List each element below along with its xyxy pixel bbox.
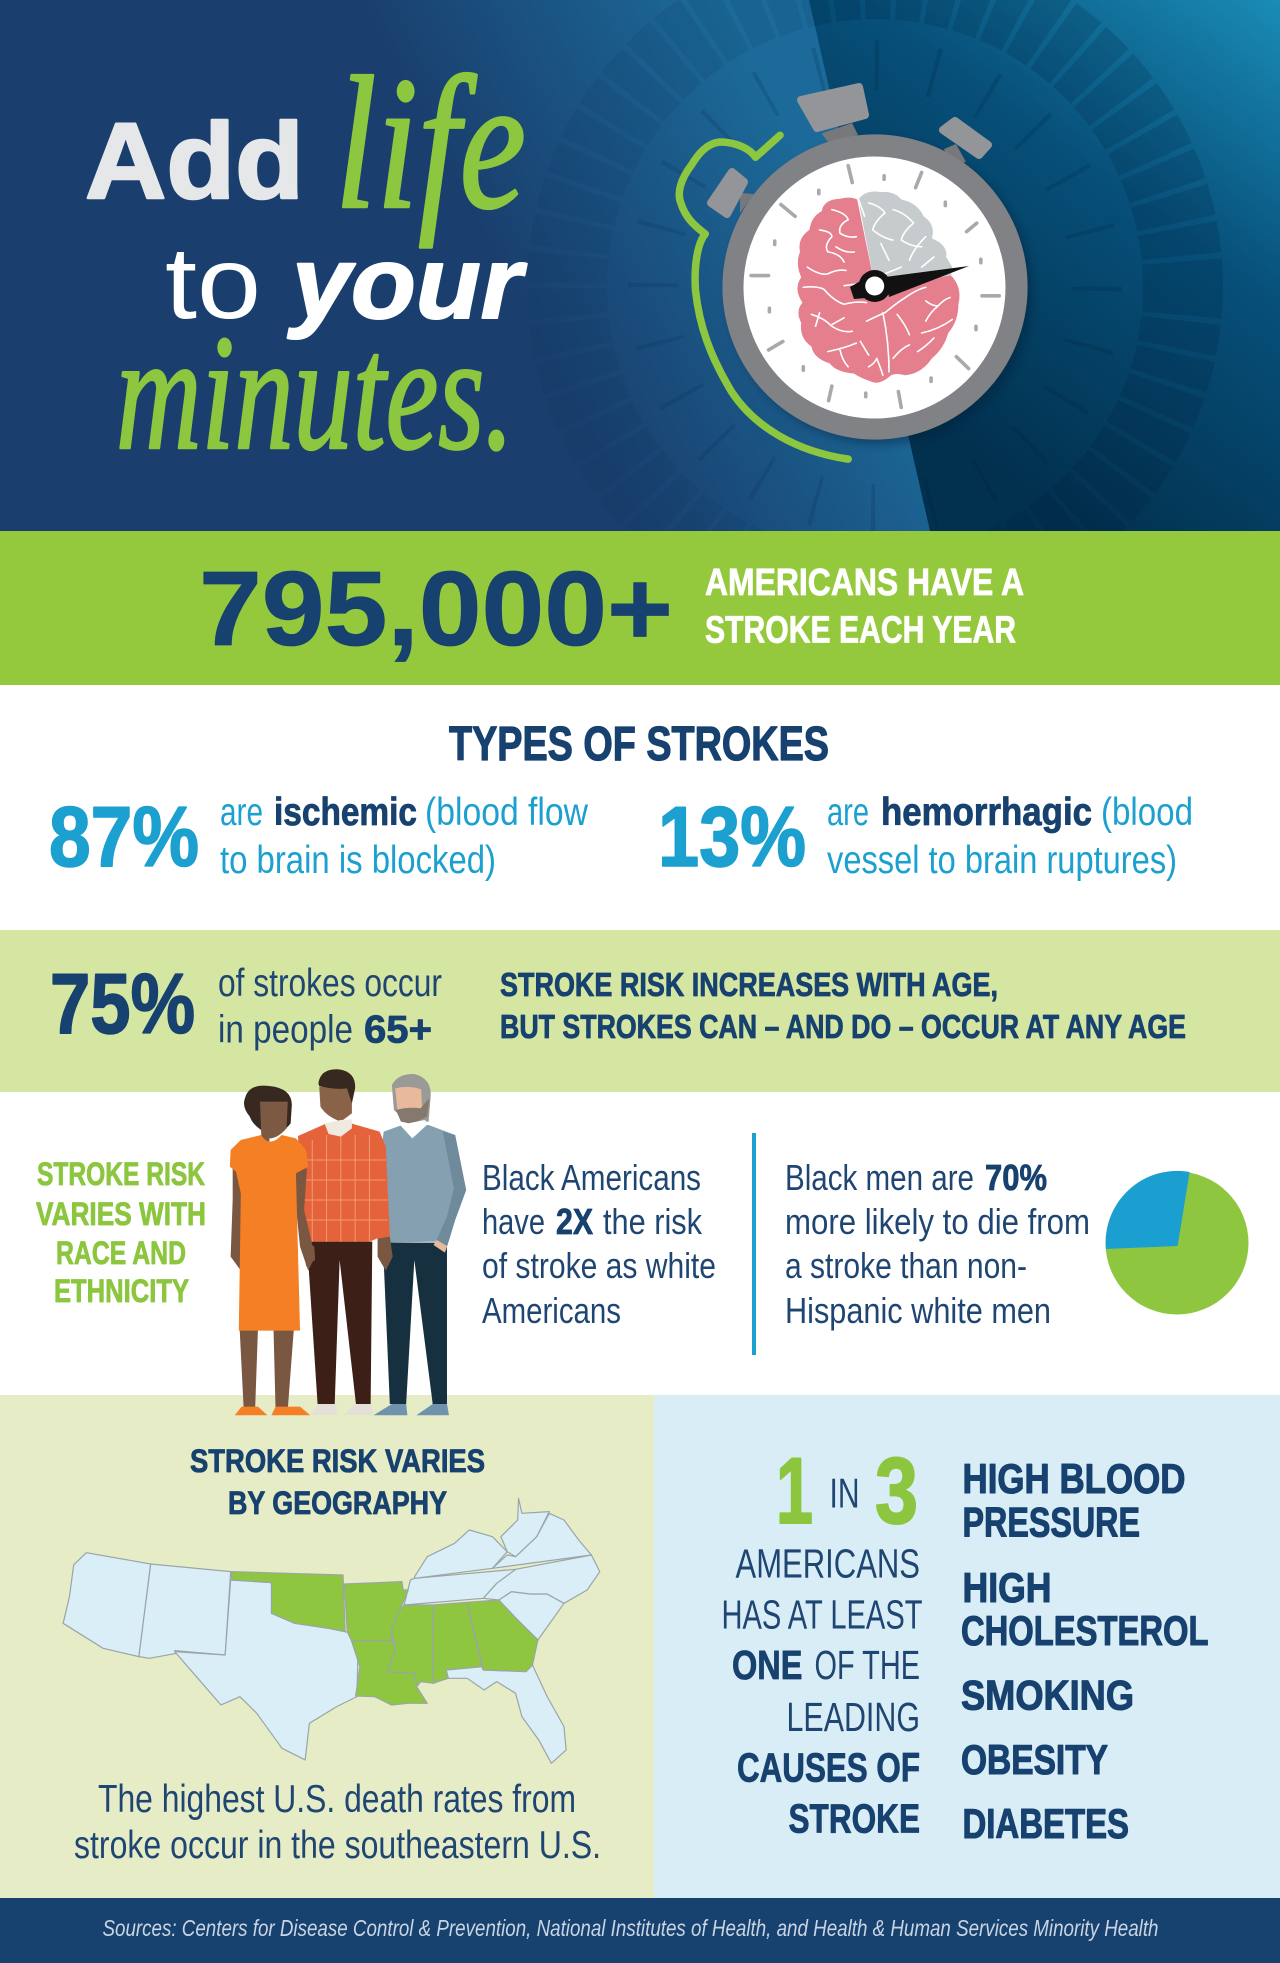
text: Black men risk [785, 1157, 1090, 1331]
stat: 87% ischemic: to brain is blocked) [220, 839, 496, 882]
1 in 3 statistic: 3 [875, 1438, 918, 1543]
text: Black Americans risk [482, 1157, 716, 1331]
stopwatch body [722, 134, 1028, 440]
race heading: RACE AND [56, 1235, 186, 1271]
panel: types of strokes [0, 685, 1280, 930]
title: minutes. [116, 301, 514, 484]
illustration: three people [230, 1069, 466, 1415]
title: life [335, 39, 526, 249]
panel: age band [0, 930, 1280, 1092]
1 in 3 statistic: IN [830, 1470, 860, 1516]
stat: 13% hemorrhagic: 13% [658, 790, 806, 885]
stat: 13% hemorrhagic [658, 790, 1193, 885]
age statement [500, 966, 1186, 1045]
heading: TYPES OF STROKES [449, 718, 829, 771]
stat: 13% hemorrhagic: vessel to brain ruptures) [827, 839, 1177, 882]
text: Black men risk: 70% [985, 1157, 1047, 1198]
race heading [36, 1156, 206, 1309]
stopwatch dial [744, 156, 1006, 418]
map: southern United States [63, 1498, 600, 1763]
age statement: STROKE RISK INCREASES WITH AGE, [500, 966, 998, 1003]
risk factor list: HIGH BLOOD [962, 1455, 1186, 1502]
panel: race and ethnicity [0, 1092, 1280, 1395]
causes statement: STROKE [788, 1796, 920, 1842]
causes statement: LEADING [786, 1694, 920, 1740]
big number: 795,000+ [199, 550, 673, 668]
risk factor list: OBESITY [961, 1736, 1108, 1783]
panel: stat banner [0, 531, 1280, 685]
stat: 87% ischemic: ischemic [274, 791, 417, 834]
dial ticks [751, 166, 999, 407]
risk factor list: DIABETES [962, 1800, 1129, 1847]
causes statement: ONE [732, 1642, 802, 1688]
text: Black Americans risk: the risk [603, 1201, 703, 1242]
causes statement: CAUSES OF [737, 1744, 920, 1790]
older man [369, 1074, 466, 1415]
text: Black Americans risk: have [482, 1201, 545, 1242]
title: your [287, 226, 528, 340]
stat: 87% ischemic: are [220, 791, 263, 834]
geography caption: stroke occur in the southeastern U.S. [74, 1824, 601, 1867]
race heading: ETHNICITY [54, 1273, 189, 1309]
stat: 75% [50, 957, 442, 1052]
title: Add [85, 100, 304, 221]
panel: sources footer [0, 1898, 1280, 1963]
text: Black men risk: more likely to die from [785, 1201, 1090, 1242]
stat: 87% ischemic [49, 790, 589, 885]
panel: geography [0, 1395, 654, 1898]
geography heading [190, 1443, 485, 1521]
risk factor list [961, 1455, 1208, 1847]
stat: 75%: 75% [50, 957, 195, 1052]
middle man [298, 1069, 393, 1415]
text: Black men risk: a stroke than non- [785, 1245, 1027, 1286]
stat: 13% hemorrhagic: are [827, 791, 869, 834]
stat: 13% hemorrhagic: hemorrhagic [881, 791, 1092, 834]
woman [230, 1086, 315, 1415]
stat: 75%: in people [218, 1008, 353, 1052]
risk factor list: HIGH [962, 1564, 1052, 1611]
clock hand [850, 266, 969, 302]
race heading: STROKE RISK [37, 1156, 205, 1192]
race heading: VARIES WITH [36, 1196, 206, 1232]
1 in 3 statistic [776, 1438, 918, 1543]
icon: stopwatch with brain [679, 87, 1033, 459]
stat: 87% ischemic: (blood flow [425, 791, 589, 834]
text: Black men risk: Hispanic white men [785, 1290, 1051, 1331]
geography caption [74, 1778, 601, 1867]
stopwatch buttons [711, 87, 988, 214]
brain [797, 191, 959, 383]
risk factor list: SMOKING [961, 1672, 1134, 1718]
text: Black Americans risk: Americans [482, 1290, 621, 1331]
stat: 87% ischemic: 87% [49, 790, 199, 885]
green motion arc [679, 135, 848, 459]
causes statement [722, 1540, 922, 1842]
panel: leading causes [654, 1395, 1280, 1898]
geography caption: The highest U.S. death rates from [98, 1778, 576, 1821]
stat: 75%: of strokes occur [218, 962, 442, 1005]
banner caption [705, 562, 1024, 652]
pie chart [1106, 1171, 1248, 1314]
risk factor list: CHOLESTEROL [961, 1607, 1208, 1654]
geography heading: STROKE RISK VARIES [190, 1443, 485, 1479]
title: to [165, 226, 261, 340]
text: Black Americans risk: 2X [556, 1201, 593, 1242]
title [86, 72, 528, 452]
causes statement: HAS AT LEAST [722, 1592, 922, 1638]
banner caption: AMERICANS HAVE A [705, 562, 1024, 604]
text: Black Americans risk: of stroke as white [482, 1245, 716, 1286]
stat: 13% hemorrhagic: (blood [1101, 791, 1193, 834]
stat: 75%: 65+ [364, 1008, 432, 1052]
causes statement: OF THE [814, 1642, 920, 1688]
geography heading: BY GEOGRAPHY [228, 1485, 447, 1521]
panel: hero [0, 0, 1280, 531]
text: Black Americans risk: Black Americans [482, 1157, 701, 1198]
banner caption: STROKE EACH YEAR [705, 610, 1016, 652]
text: Black men risk: Black men are [785, 1157, 974, 1198]
risk factor list: PRESSURE [962, 1498, 1140, 1546]
1 in 3 statistic: 1 [776, 1438, 813, 1543]
causes statement: AMERICANS [736, 1540, 920, 1586]
